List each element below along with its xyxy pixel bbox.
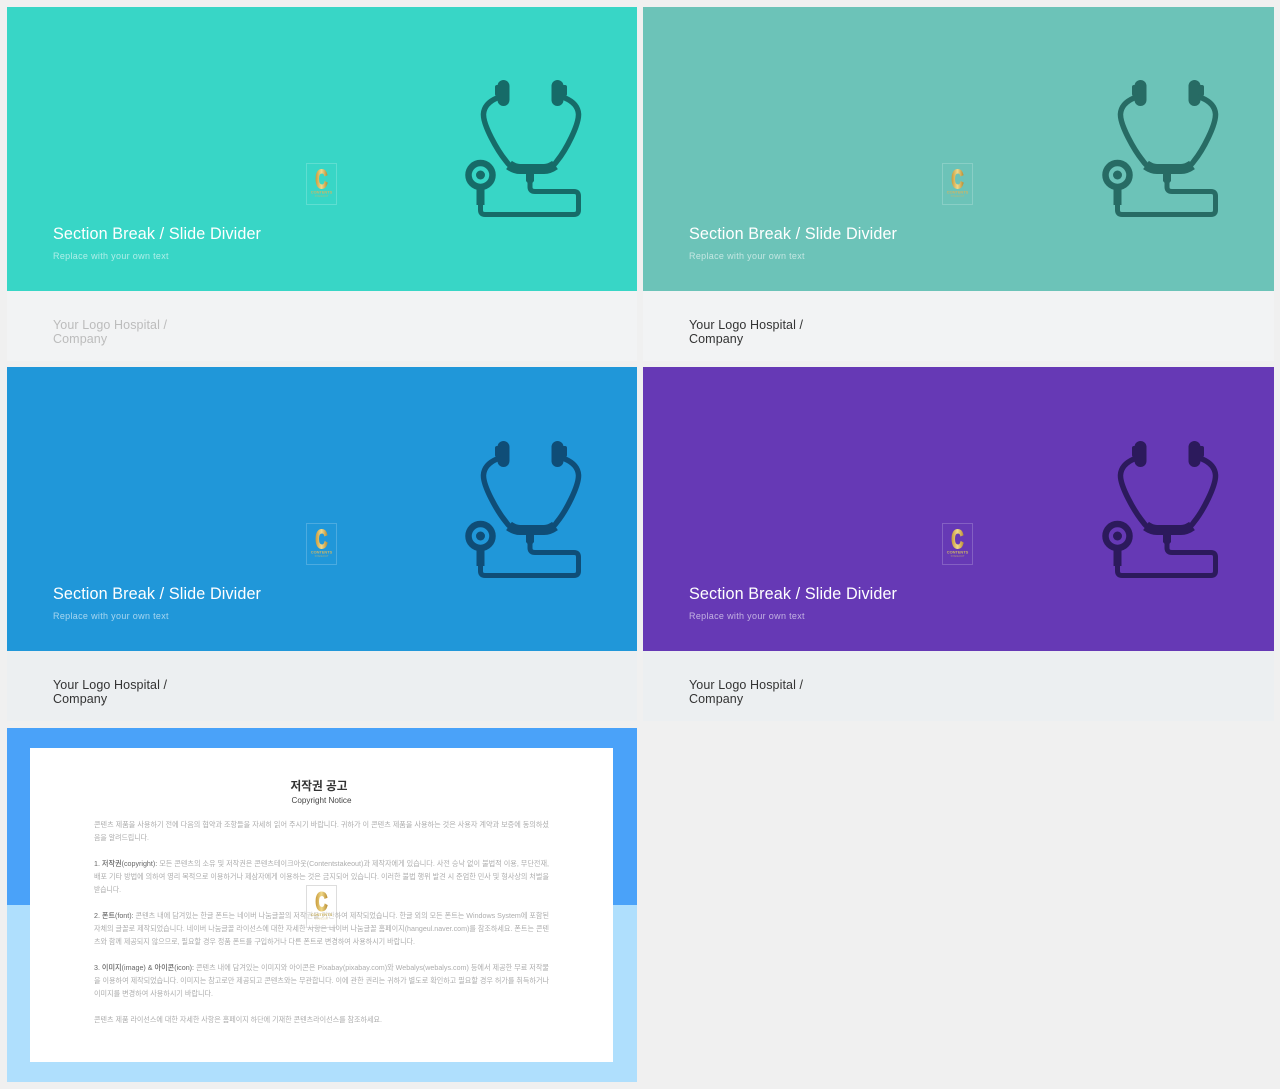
heading: Section Break / Slide Divider: [53, 225, 261, 243]
clause 1: copyright: 1. 저작권(copyright): 모든 콘텐츠의 소유 및 저작권은 콘텐츠테이크아웃(Contentstakeout)과 제작자에게 있습니다. 사전 승낙 없이 불법적 이용, 무단전재,: [94, 858, 549, 868]
subheading: Replace with your own text: [689, 611, 805, 621]
panel: copyright notice slide: [7, 728, 637, 1082]
clause 2: font: [94, 910, 549, 946]
panel: blue section break slide: [7, 367, 637, 721]
intro paragraph: [94, 819, 549, 842]
colour band: teal: [7, 7, 638, 291]
clause 2: font: 츠와 함께 제공되지 않으므로, 필요할 경우 정품 폰트를 구입하거나 다른 폰트로 변경하여 사용하시기 바랍니다.: [94, 936, 415, 946]
badge: contents logo: [942, 163, 973, 205]
logo text: Your Logo Hospital / Company: [53, 678, 167, 706]
clause 3: images and icons: 을 이용하여 제작되었습니다. 이미지는 참고로만 제공되고 콘텐츠와는 무관합니다. 이에 관한 권리는 귀하가 별도로 확인하고 필요할 경우 허가를 취득하거나: [94, 975, 549, 985]
intro paragraph: 콘텐츠 제품을 사용하기 전에 다음의 협약과 조항들을 자세히 읽어 주시기 바랍니다. 귀하가 이 콘텐츠 제품을 사용하는 것은 사용자 계약과 보증에 동의하셨: [94, 819, 549, 829]
clause 3: images and icons: 3. 이미지(image) & 아이콘(icon): 콘텐츠 내에 담겨있는 이미지와 아이콘은 Pixabay(pixabay.com)와 Webalys(webalys.com) 등에서 제공한 무료 저작물: [94, 962, 549, 972]
logo text: Your Logo Hospital / Company: [689, 318, 803, 346]
logo text: Your Logo Hospital / Company: [53, 318, 167, 346]
colour band: purple: [643, 367, 1274, 651]
badge: contents logo: [942, 523, 973, 565]
notice subtitle: Copyright Notice: [292, 795, 352, 805]
icon: stethoscope: [465, 80, 582, 217]
colour band: muted green: [643, 7, 1274, 291]
logo text: Your Logo Hospital / Company: [689, 678, 803, 706]
intro paragraph: 음을 알려드립니다.: [94, 832, 149, 842]
subheading: Replace with your own text: [53, 251, 169, 261]
clause 1: copyright: 받습니다.: [94, 884, 121, 894]
icon: stethoscope: [1102, 441, 1218, 578]
badge: contents logo: [306, 885, 337, 928]
subheading: Replace with your own text: [689, 251, 805, 261]
notice card: [30, 748, 613, 1062]
icon: stethoscope: [465, 441, 582, 578]
badge: contents logo: [306, 523, 337, 565]
panel: muted green section break slide: [643, 7, 1274, 361]
notice text: [94, 778, 549, 1024]
clause 1: copyright: [94, 858, 549, 894]
clause 2: font: 2. 폰트(font): 콘텐츠 내에 담겨있는 한글 폰트는 네이버 나눔글꼴의 저작권을 기반하여 제작되었습니다. 한글 외의 모든 폰트는 Windows System에 포함된: [94, 910, 549, 920]
panel: purple section break slide: [643, 367, 1274, 721]
subheading: Replace with your own text: [53, 611, 169, 621]
panel: teal section break slide: [7, 7, 637, 361]
clause 3: images and icons: [94, 962, 549, 998]
clause 2: font: 자체의 글꼴로 제작되었습니다. 네이버 나눔글꼴 라이선스에 대한 자세한 사항은 네이버 나눔글꼴 홈페이지(hangeul.naver.com)를 참조하세요. 폰트는 콘텐: [94, 923, 549, 933]
notice title: 저작권 공고: [290, 778, 348, 793]
colour band: blue: [7, 367, 638, 651]
heading: Section Break / Slide Divider: [689, 585, 897, 603]
badge: contents logo: [306, 163, 337, 205]
heading: Section Break / Slide Divider: [53, 585, 261, 603]
clause 3: images and icons: 이미지를 변경하여 사용하시기 바랍니다.: [94, 988, 213, 998]
background: upper blue band: [7, 728, 637, 905]
closing line: 콘텐츠 제품 라이선스에 대한 자세한 사항은 홈페이지 하단에 기재한 콘텐츠라이선스를 참조하세요.: [94, 1014, 382, 1024]
clause 1: copyright: 배포 기타 방법에 의하여 영리 목적으로 이용하거나 제삼자에게 이용하는 것은 금지되어 있습니다. 이러한 불법 행위 발견 시 준엄한 민사 및 형사상의 처벌을: [94, 871, 549, 881]
icon: stethoscope: [1102, 80, 1218, 217]
heading: Section Break / Slide Divider: [689, 225, 897, 243]
